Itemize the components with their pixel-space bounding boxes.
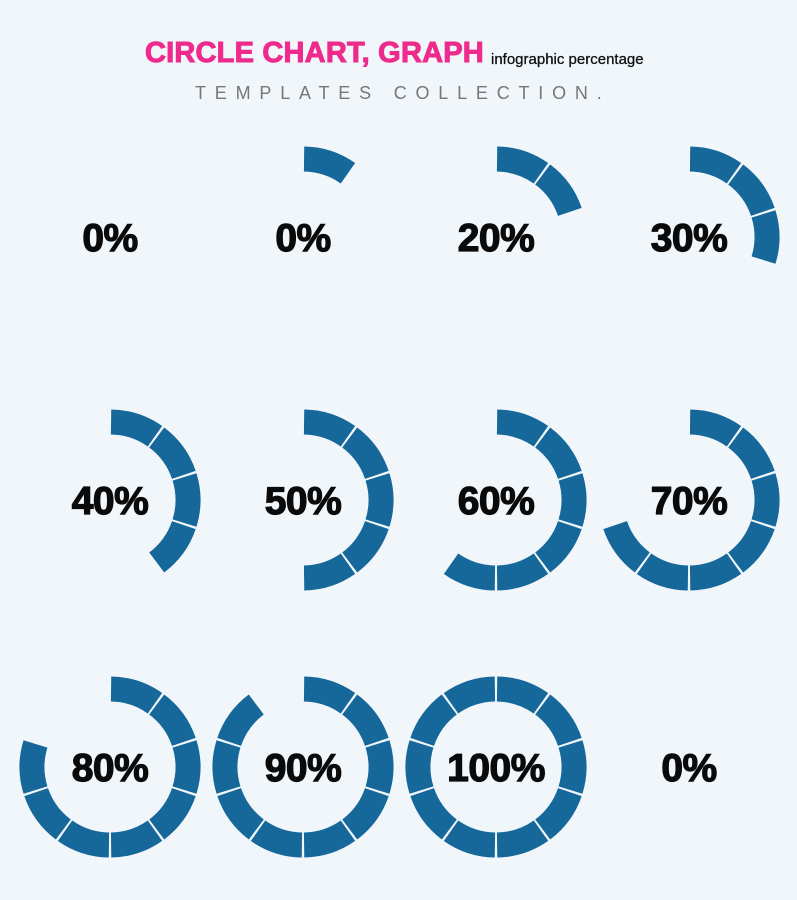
chart: 0%: 0% <box>82 217 138 260</box>
chart: 70% <box>607 422 777 590</box>
chart: 0% last: 0% <box>661 747 717 790</box>
subtitle small: infographic percentage <box>491 51 644 68</box>
chart: 100%: 100% <box>447 747 545 790</box>
chart: 20% <box>458 159 578 260</box>
chart: 50%: 50% <box>265 480 341 523</box>
chart: 70%: 70% <box>651 480 727 523</box>
subtitle: TEMPLATES COLLECTION. <box>195 83 611 103</box>
chart: 0% one segment <box>275 159 348 260</box>
chart: 100% <box>408 677 584 857</box>
chart: 30% <box>651 159 777 260</box>
chart: 60% <box>451 422 584 590</box>
chart: 90% <box>215 689 391 857</box>
chart: 50% <box>265 422 391 590</box>
chart: 40% <box>72 422 198 567</box>
chart: 0% one segment: 0% <box>275 217 331 260</box>
chart: 30%: 30% <box>651 217 727 260</box>
chart: 20%: 20% <box>458 217 534 260</box>
chart: 60%: 60% <box>458 480 534 523</box>
chart: 90%: 90% <box>265 747 341 790</box>
chart: 80% <box>22 689 198 857</box>
title: CIRCLE CHART, GRAPH <box>145 37 484 69</box>
chart: 80%: 80% <box>72 747 148 790</box>
chart: 40%: 40% <box>72 480 148 523</box>
